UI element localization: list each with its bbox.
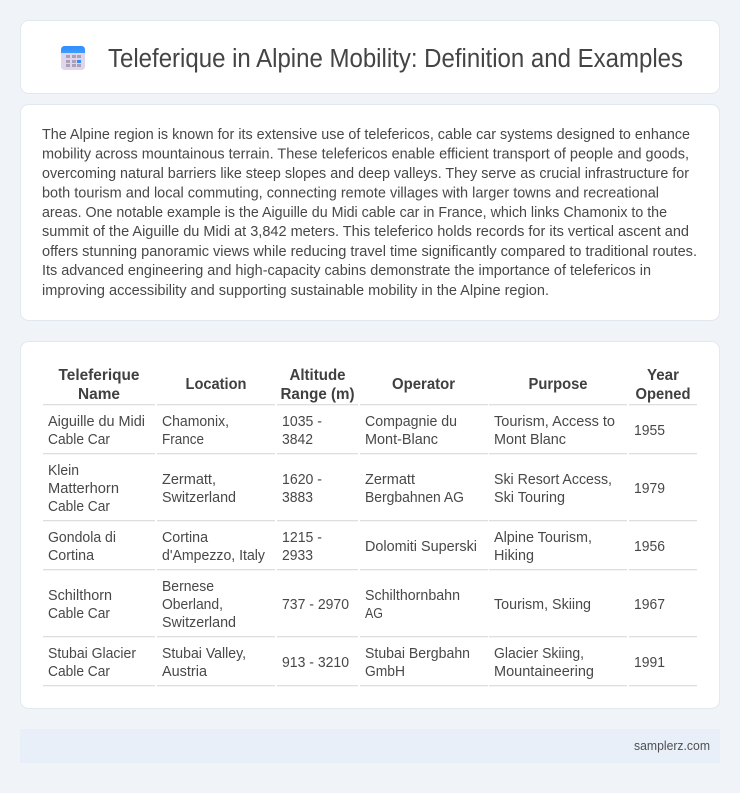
text block: introduction paragraph: improving accessibility and supporting sustainable mobility in the Alpine region.	[42, 283, 549, 299]
table row: Stubai Glacier: Stubai Valley,	[162, 646, 246, 662]
table row: Stubai Glacier: Stubai Glacier	[48, 646, 136, 662]
table row: Schilthorn: Cable Car	[48, 606, 110, 622]
table row: Aiguille du Midi: Aiguille du Midi	[48, 414, 145, 430]
table row: Stubai Glacier	[48, 646, 665, 680]
table row: Aiguille du Midi: 3842	[282, 432, 313, 448]
table row: Schilthorn: AG	[365, 606, 383, 622]
table row: Schilthorn: Bernese	[162, 579, 214, 595]
text block: introduction paragraph: mobility across mountainous terrain. These telefericos enable efficient transport of people and goods,	[42, 146, 689, 162]
table row: Gondola di Cortina	[48, 530, 665, 564]
table row: Aiguille du Midi: 1955	[634, 423, 665, 439]
text block: introduction paragraph: The Alpine region is known for its extensive use of telefericos, cable car systems designed to enhance	[42, 127, 690, 143]
table row: Gondola di Cortina: Cortina	[162, 530, 208, 546]
table row: Klein Matterhorn: Matterhorn	[48, 481, 119, 497]
footer source text: samplerz.com	[634, 739, 710, 753]
table row: Aiguille du Midi: Mont Blanc	[494, 432, 566, 448]
table row: Klein Matterhorn: 1979	[634, 481, 665, 497]
table row: Klein Matterhorn: Cable Car	[48, 499, 110, 515]
table row: Stubai Glacier: 1991	[634, 655, 665, 671]
table row: Aiguille du Midi: 1035 -	[282, 414, 322, 430]
text block: introduction paragraph: Its advanced engineering and high-capacity cabins demonstrate the importance of telefericos in	[42, 263, 651, 279]
table row: Schilthorn: Oberland,	[162, 597, 223, 613]
table row: Gondola di Cortina: Cortina	[48, 548, 94, 564]
table row: Gondola di Cortina: 1215 -	[282, 530, 322, 546]
table row: Klein Matterhorn: 1620 -	[282, 472, 322, 488]
table row: Klein Matterhorn: 3883	[282, 490, 313, 506]
table row: Klein Matterhorn: Zermatt,	[162, 472, 216, 488]
table row: Stubai Glacier: Stubai Bergbahn	[365, 646, 470, 662]
table row: Schilthorn: Tourism, Skiing	[494, 597, 591, 613]
table row: Schilthorn: Schilthorn	[48, 588, 112, 604]
table row: Aiguille du Midi: Chamonix,	[162, 414, 229, 430]
table row: Klein Matterhorn: Bergbahnen AG	[365, 490, 464, 506]
table row: Schilthorn: Switzerland	[162, 615, 236, 631]
table row: Schilthorn: 1967	[634, 597, 665, 613]
text block: introduction paragraph: overcoming natural barriers like steep slopes and deep valleys. They serve as crucial infrastructure for	[42, 166, 689, 182]
table row: Klein Matterhorn: Ski Touring	[494, 490, 565, 506]
table row: Klein Matterhorn: Zermatt	[365, 472, 415, 488]
table header row: Range (m)	[280, 386, 354, 403]
text block: introduction paragraph: offers stunning panoramic views while reducing travel time significantly compared to traditional routes.	[42, 244, 697, 260]
title: Teleferique in Alpine Mobility: Definition and Examples	[108, 45, 683, 73]
table row: Klein Matterhorn: Ski Resort Access,	[494, 472, 612, 488]
table row: Gondola di Cortina: d'Ampezzo, Italy	[162, 548, 266, 564]
table row: Stubai Glacier: Mountaineering	[494, 664, 594, 680]
table row: Klein Matterhorn	[48, 463, 665, 515]
table row: Aiguille du Midi: France	[162, 432, 204, 448]
table row: Stubai Glacier: 913 - 3210	[282, 655, 349, 671]
table row: Stubai Glacier: Cable Car	[48, 664, 110, 680]
text block: introduction paragraph	[42, 127, 697, 299]
text block: introduction paragraph: areas. One notable example is the Aiguille du Midi cable car in France, which links Chamonix to the	[42, 205, 667, 221]
icon: calendar	[61, 46, 85, 70]
table row: Gondola di Cortina: Alpine Tourism,	[494, 530, 592, 546]
table row: Aiguille du Midi: Mont-Blanc	[365, 432, 438, 448]
table row: Gondola di Cortina: Hiking	[494, 548, 534, 564]
panel: teleferique table	[20, 342, 720, 708]
table header row: Name	[78, 386, 120, 403]
table header row: Year	[647, 367, 679, 384]
table row: Stubai Glacier: Glacier Skiing,	[494, 646, 584, 662]
panel: title header	[20, 20, 720, 94]
table row: Stubai Glacier: Austria	[162, 664, 207, 680]
table row: Gondola di Cortina: 2933	[282, 548, 313, 564]
table row: Aiguille du Midi: Tourism, Access to	[494, 414, 615, 430]
table row: Gondola di Cortina: Gondola di	[48, 530, 116, 546]
table header row: Purpose	[528, 376, 588, 393]
table header row	[58, 367, 690, 403]
table row: Aiguille du Midi: Compagnie du	[365, 414, 457, 430]
table row: Schilthorn: 737 - 2970	[282, 597, 349, 613]
table header row: Altitude	[290, 367, 346, 384]
panel: description	[20, 104, 720, 320]
table header row: Teleferique	[58, 367, 140, 384]
table row: Klein Matterhorn: Switzerland	[162, 490, 236, 506]
table row: Schilthorn	[48, 579, 665, 631]
table header row: Location	[186, 376, 246, 393]
text block: introduction paragraph: summit of the Aiguille du Midi at 3,842 meters. This teleferico holds records for its vertical ascent and	[42, 224, 689, 240]
table row: Schilthorn: Schilthornbahn	[365, 588, 460, 604]
table row: Aiguille du Midi: Cable Car	[48, 432, 110, 448]
footer bar	[20, 729, 720, 763]
table header row: Operator	[392, 376, 455, 393]
table row: Aiguille du Midi	[48, 414, 665, 448]
table header row: Opened	[636, 386, 690, 403]
table row: Stubai Glacier: GmbH	[365, 664, 405, 680]
table row: Gondola di Cortina: Dolomiti Superski	[365, 539, 477, 555]
table row: Gondola di Cortina: 1956	[634, 539, 665, 555]
text block: introduction paragraph: both tourism and local commuting, connecting remote villages with larger towns and recreational	[42, 186, 659, 202]
table row: Klein Matterhorn: Klein	[48, 463, 79, 479]
